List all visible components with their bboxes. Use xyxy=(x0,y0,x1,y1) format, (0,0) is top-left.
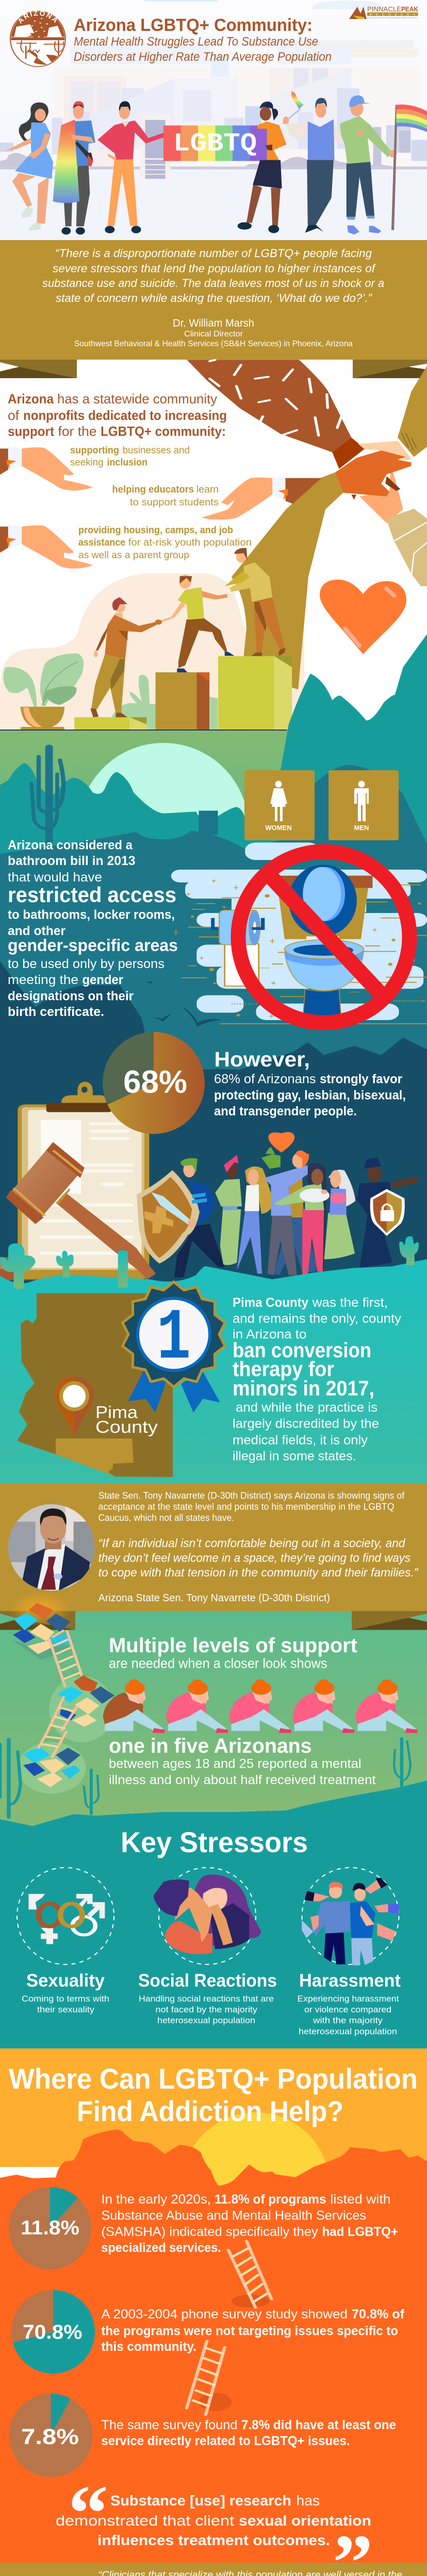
statistic: 11.8 percent xyxy=(9,2187,398,2269)
statistic: 11.8 percent: (SAMSHA) indicated specifically they xyxy=(101,2225,318,2239)
heading: Multiple levels of support xyxy=(109,1634,357,1657)
statistic: 70.8 percent: the programs were not targeting issues specific to xyxy=(101,2324,398,2338)
illustration: woman in blue dress xyxy=(5,103,53,231)
bathroom bill text: bathroom bill in 2013 xyxy=(8,854,135,868)
small Pinnacle Peak logo: RECOVERY xyxy=(370,13,415,16)
statistic: 11.8 percent: listed with xyxy=(330,2192,391,2207)
bathroom bill text: that would have xyxy=(8,870,102,885)
Pima County label: Pima xyxy=(95,1402,138,1422)
one in five text xyxy=(109,1735,376,1787)
portrait: Tony Navarrete xyxy=(8,1504,95,1591)
ribbon badge number one: 1 xyxy=(157,1298,191,1380)
support item 3: assistance xyxy=(78,537,125,548)
however text: protecting gay, lesbian, bisexual, xyxy=(214,1088,406,1103)
illustration: shield with sword xyxy=(137,1170,200,1263)
conversion therapy text: ban conversion xyxy=(233,1338,371,1362)
icon: gender symbols xyxy=(28,1894,105,1944)
pull quote: influences treatment outcomes. xyxy=(97,2532,330,2548)
illustration: woman holding banner xyxy=(238,101,287,233)
attribution: Dr. William Marsh xyxy=(173,317,254,329)
title: Arizona LGBTQ+ Community: xyxy=(74,15,313,35)
illustration: clipboard xyxy=(0,1082,149,1280)
icon: two women whispering xyxy=(154,1874,261,1954)
heading: Find Addiction Help? xyxy=(77,2095,343,2127)
illustration: person with rainbow scarf xyxy=(53,101,95,234)
illustration: dark navy hills xyxy=(0,961,427,1344)
support item 1: businesses and xyxy=(123,445,190,456)
support item 2 xyxy=(112,484,219,508)
icon: people pointing at two men xyxy=(302,1878,399,1965)
small Pinnacle Peak logo xyxy=(349,6,418,19)
map of Arizona xyxy=(17,1293,173,1477)
conversion therapy text xyxy=(233,1295,402,1464)
emblem lettering: ARIZONA xyxy=(19,10,57,24)
icon: orange heart balloon xyxy=(266,1132,308,1154)
illustration: lower puzzle base xyxy=(18,1731,86,1793)
panel: Dr. William Marsh quote xyxy=(0,2563,427,2576)
illustration: upper puzzle stack with ladder xyxy=(9,1591,85,1687)
statistic: 11.8 percent: 11.8% of programs xyxy=(215,2192,326,2207)
heading xyxy=(9,2062,418,2127)
pull quote xyxy=(56,2469,373,2576)
illustration: diverse crowd xyxy=(174,1153,419,1277)
quote text xyxy=(42,247,384,304)
bathroom bill text: birth certificate. xyxy=(8,1005,104,1019)
illustration: orange mountains xyxy=(0,2129,427,2308)
illustration: raised arm with white dashes xyxy=(187,360,365,469)
bathroom bill text: gender xyxy=(83,973,123,987)
Pima County highlight xyxy=(56,1438,134,1477)
statistic: 7.8 percent xyxy=(9,2394,396,2477)
ribbon folds xyxy=(0,360,427,378)
illustration: toilet scene with clouds xyxy=(171,842,427,1024)
toilet xyxy=(274,865,372,1015)
pie chart: 68 percent xyxy=(103,1032,205,1134)
panel: 68 percent favor protection xyxy=(0,1032,419,1280)
panel: Arizona nonprofits support xyxy=(0,360,427,731)
statistic: 11.8 percent: 11.8% xyxy=(21,2217,79,2239)
navarrete quote: they don’t feel welcome in a space, they’re going to find ways xyxy=(98,1551,410,1564)
support item 3: as well as a parent group xyxy=(78,550,189,561)
quote text: state of concern while asking the question, ‘What do we do?’.” xyxy=(56,292,372,304)
statistic: 11.8 percent: had LGBTQ+ xyxy=(322,2225,398,2239)
support item 1 xyxy=(70,445,190,468)
conversion therapy text: and remains the only, county xyxy=(233,1312,402,1326)
support item 1: supporting xyxy=(70,445,119,456)
quote text: severe stressors that lend the population to higher instances of xyxy=(53,262,376,275)
illustration: gavel xyxy=(6,1142,156,1280)
one in five text: between ages 18 and 25 reported a mental xyxy=(109,1756,362,1771)
small cacti xyxy=(0,1236,419,1289)
panel: where to find addiction help xyxy=(0,2048,427,2576)
figure: highlighted xyxy=(103,1680,165,1733)
statistic: 70.8 percent xyxy=(11,2290,405,2374)
illustration: olive arm over backdrop xyxy=(232,577,308,689)
stressor: sexuality: their sexuality xyxy=(37,2005,95,2014)
restroom sign: men xyxy=(329,770,399,840)
statistic: 7.8 percent: 7.8% did have at least one xyxy=(241,2418,396,2432)
pull quote: Substance [use] research xyxy=(110,2493,291,2509)
navarrete summary: acceptance at the state level and points to his membership in the LGBTQ xyxy=(98,1502,395,1512)
illustration: ladder between statistics xyxy=(228,2241,272,2308)
panel: Pima County conversion therapy ban xyxy=(0,1236,427,1484)
section text: nonprofits: Arizona xyxy=(8,391,54,406)
LGBTQ banner xyxy=(163,126,267,161)
stressor: harassment xyxy=(298,1868,401,2037)
conversion therapy text: illegal in some states. xyxy=(233,1449,356,1464)
panel: State Sen. Tony Navarrete quote xyxy=(0,1484,427,1611)
section text: nonprofits: of xyxy=(8,408,20,423)
illustration: man in red sweater xyxy=(97,101,165,233)
however text: strongly favor xyxy=(320,1072,402,1086)
stressor: harassment: heterosexual population xyxy=(299,2027,397,2037)
illustration: second ladder xyxy=(187,2341,232,2415)
bathroom bill text: gender-specific areas xyxy=(8,936,178,955)
support item 3 xyxy=(78,524,252,561)
stressor: social reactions: Handling social reactions that are xyxy=(139,1994,274,2004)
bathroom bill text: Arizona considered a xyxy=(8,838,133,853)
small Pinnacle Peak logo: CLINICAL EXCELLENCE | COMPASSIONATE CARE | FAMILY FEEL xyxy=(367,17,418,19)
hand icon 3 xyxy=(0,524,93,569)
support item 3: for at-risk youth population xyxy=(128,537,252,548)
attribution: Southwest Behavioral & Health Services (SB&H Services) in Phoenix, Arizona xyxy=(74,340,353,348)
navarrete quote: “If an individual isn’t comfortable being out in a society, and xyxy=(98,1536,406,1550)
stressor: harassment: with the majority xyxy=(313,2015,383,2025)
stressor: harassment: Experiencing harassment xyxy=(298,1994,399,2004)
figure 2 xyxy=(166,1680,228,1733)
statistic: 70.8 percent: A 2003-2004 phone survey study showed xyxy=(101,2307,348,2321)
conversion therapy text: in Arizona to xyxy=(233,1327,306,1342)
section text: nonprofits xyxy=(8,391,227,439)
restroom sign: men: MEN xyxy=(354,824,369,832)
bathroom bill text: restricted access xyxy=(8,883,176,907)
five seated figures: one in five xyxy=(103,1680,418,1733)
Pima County label xyxy=(95,1402,158,1436)
support item 1: inclusion xyxy=(107,457,147,468)
section text: nonprofits: for the xyxy=(58,423,97,439)
panel: multiple levels of support xyxy=(0,1591,427,1826)
stressor: sexuality xyxy=(17,1868,114,2014)
stressor: social reactions: not faced by the majority xyxy=(156,2005,258,2014)
illustration: green section cacti xyxy=(0,1738,410,1818)
stressor: social reactions: Social Reactions xyxy=(138,1971,277,1991)
statistic: 70.8 percent: this community. xyxy=(101,2340,196,2354)
bathroom bill text: meeting the xyxy=(8,973,78,987)
pull quote: demonstrated that client xyxy=(56,2513,234,2529)
illustration: gold sleeve arm and hands joined xyxy=(335,366,427,586)
conversion therapy text: medical fields, it is only xyxy=(233,1433,368,1448)
ribbon folds xyxy=(0,1611,427,1630)
section text: nonprofits: nonprofits dedicated to increasing xyxy=(23,408,227,423)
Arizona emblem xyxy=(8,9,68,66)
navarrete summary: Caucus, which not all states have. xyxy=(98,1513,234,1523)
statistic: 7.8 percent: The same survey found xyxy=(101,2418,237,2432)
stressor: sexuality: Coming to terms with xyxy=(22,1994,109,2004)
statistic: 70.8 percent: 70.8% of xyxy=(352,2307,405,2321)
conversion therapy text: therapy for xyxy=(233,1357,334,1381)
however text: However, xyxy=(215,1047,310,1071)
navarrete quote xyxy=(98,1536,419,1579)
illustration: birds xyxy=(146,980,222,1026)
however text: 68% of Arizonans xyxy=(214,1072,316,1086)
quote text: substance use and suicide. The data leaves most of us in shock or a xyxy=(42,277,384,290)
navarrete attribution: Arizona State Sen. Tony Navarrete (D-30th District) xyxy=(98,1592,330,1604)
illustration: lower puzzle stack xyxy=(47,1675,114,1742)
statistic: 7.8 percent: service directly related to LGBTQ+ issues. xyxy=(101,2434,350,2448)
pie chart: 68 percent: 68% xyxy=(123,1064,187,1100)
illustration: beige backdrop blob xyxy=(0,573,304,730)
heading xyxy=(109,1634,357,1671)
illustration: man in green sweater with rainbow flag xyxy=(340,95,427,234)
conversion therapy text: and while the practice is xyxy=(236,1400,377,1415)
support item 1: seeking xyxy=(70,457,104,468)
support item 3: providing housing, camps, and job xyxy=(78,524,233,536)
LGBTQ banner: LGBTQ xyxy=(173,129,257,159)
pull quote: “ xyxy=(68,2469,108,2557)
subtitle: Disorders at Higher Rate Than Average Population xyxy=(74,50,332,64)
conversion therapy text: Pima County xyxy=(233,1295,308,1310)
restroom sign: women: WOMEN xyxy=(265,824,292,832)
conversion therapy text: minors in 2017, xyxy=(233,1377,374,1400)
navarrete quote: to cope with that tension in the community and their families.” xyxy=(98,1566,419,1579)
small Pinnacle Peak logo: PEAK xyxy=(401,6,418,13)
restroom sign: women xyxy=(244,770,315,840)
subtitle: Mental Health Struggles Lead To Substance Use xyxy=(74,35,318,48)
illustration: dark teal foreground hills xyxy=(0,765,427,1074)
panel: opening quote band xyxy=(0,240,427,360)
panel: key stressors xyxy=(0,1781,427,2049)
conversion therapy text: was the first, xyxy=(312,1295,388,1310)
stressor: sexuality: Sexuality xyxy=(26,1971,105,1991)
illustration: large olive arm xyxy=(232,472,343,689)
statistic: 7.8 percent: 7.8% xyxy=(21,2425,79,2449)
pull quote: has xyxy=(296,2493,320,2509)
icon: lock shield xyxy=(370,1189,405,1236)
city skyline backdrop xyxy=(0,0,427,240)
prohibition symbol xyxy=(238,852,409,1023)
statistic: 11.8 percent: In the early 2020s, xyxy=(101,2192,211,2207)
pull quote: sexual orientation xyxy=(239,2513,371,2529)
quote text: “There is a disproportionate number of LGBTQ+ people facing xyxy=(55,247,372,260)
icon: location pin xyxy=(55,1377,94,1437)
section text: nonprofits: has a statewide community xyxy=(57,391,217,406)
illustration: orange heart xyxy=(320,580,406,654)
heading: Key Stressors: Key Stressors xyxy=(121,1826,308,1858)
statistic: 11.8 percent: specialized services. xyxy=(101,2241,221,2255)
statistic: 70.8 percent: 70.8% xyxy=(23,2321,83,2344)
panel: bathroom bill desert scene xyxy=(0,634,427,1344)
bathroom bill text: and other xyxy=(8,924,65,938)
stressor: harassment: Harassment xyxy=(299,1971,401,1991)
illustration: teal mountains xyxy=(0,634,427,866)
stressor: social reactions xyxy=(138,1868,277,2025)
hand icon 1 xyxy=(0,446,93,490)
one in five text: one in five Arizonans xyxy=(109,1735,311,1757)
stressor: social reactions: heterosexual population xyxy=(157,2015,255,2025)
figure 4 xyxy=(292,1680,354,1733)
bathroom bill text: designations on their xyxy=(8,989,134,1004)
illustration: climbing people on steps xyxy=(74,548,302,730)
support item 2: learn xyxy=(196,484,219,495)
section text: nonprofits: LGBTQ+ community: xyxy=(101,423,226,439)
toilet paper roll xyxy=(211,910,265,986)
panel: header and community illustration xyxy=(0,0,427,240)
illustration: potted plant xyxy=(3,653,84,730)
illustration: saguaro cactus xyxy=(31,747,208,844)
illustration: pale sun xyxy=(78,743,249,913)
bathroom bill text: to be used only by persons xyxy=(8,957,165,971)
navarrete summary: State Sen. Tony Navarrete (D-30th District) says Arizona is showing signs of xyxy=(98,1490,405,1501)
bathroom bill text: to bathrooms, locker rooms, xyxy=(8,908,175,922)
hand icon 2 xyxy=(202,476,321,520)
attribution xyxy=(74,317,353,348)
subtitle xyxy=(74,35,332,64)
support item 2: helping educators xyxy=(112,484,194,495)
bathroom bill text xyxy=(8,838,178,1019)
however text: and transgender people. xyxy=(214,1104,357,1118)
figure 5 xyxy=(356,1680,418,1733)
one in five text: illness and only about half received treatment xyxy=(109,1773,376,1787)
navarrete summary xyxy=(98,1490,405,1523)
heading: are needed when a closer look shows xyxy=(109,1657,327,1671)
illustration: yellow sun xyxy=(182,2112,330,2260)
support item 2: to support students xyxy=(130,497,219,508)
conversion therapy text: largely discredited by the xyxy=(233,1416,379,1431)
illustration: man with vest and small pride flag xyxy=(282,91,343,233)
however text xyxy=(214,1047,406,1118)
stressor: harassment: or violence compared xyxy=(304,2005,391,2014)
ribbon badge number one xyxy=(123,1282,225,1413)
small Pinnacle Peak logo: PINNACLE xyxy=(367,6,401,13)
figure 3 xyxy=(229,1680,291,1733)
attribution: Clinical Director xyxy=(184,330,243,338)
statistic: 11.8 percent: Substance Abuse and Mental Health Services xyxy=(101,2209,366,2223)
section text: nonprofits: support xyxy=(8,423,54,439)
Pima County label: County xyxy=(95,1417,158,1436)
